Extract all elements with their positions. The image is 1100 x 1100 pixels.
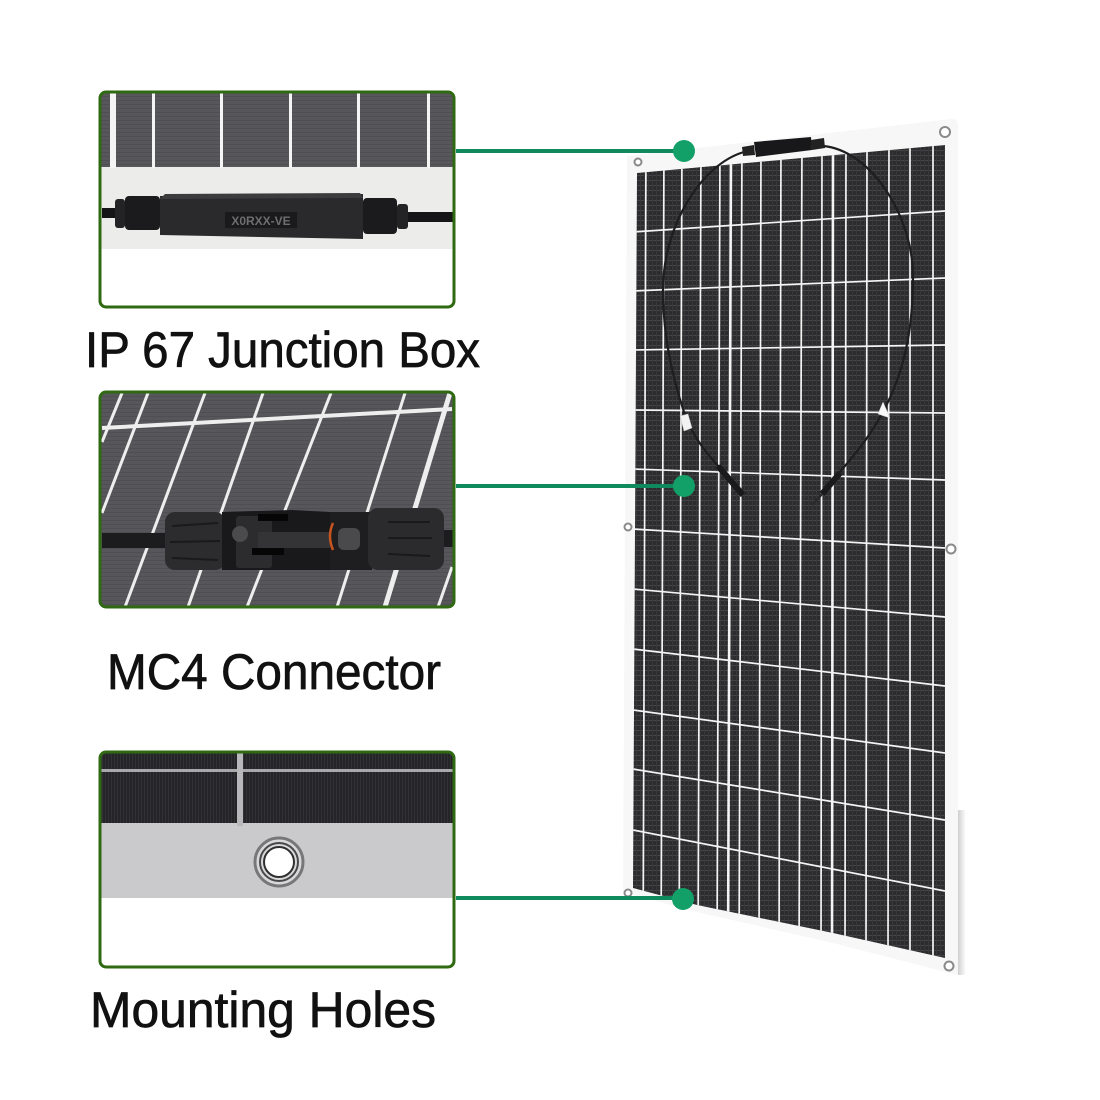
detail panel: mounting holes (100, 752, 456, 968)
solar cell grid (630, 140, 950, 965)
detail panel: MC4 connector (100, 392, 456, 608)
panel white backing sheet (623, 119, 958, 975)
callout connector: MC4 (456, 475, 695, 497)
heading: IP 67 Junction Box: IP 67 Junction Box (85, 322, 480, 378)
callout connector: mounting holes (456, 888, 694, 910)
panel shadow (958, 810, 966, 975)
detail panel: junction box (100, 92, 456, 308)
mounting grommets (624, 127, 956, 970)
solar panel (623, 119, 966, 975)
junction box label text: X0RXX-VE (231, 214, 291, 228)
heading: MC4 Connector: MC4 Connector (107, 644, 441, 700)
heading: Mounting Holes: Mounting Holes (90, 982, 436, 1038)
looped cable with junction box and connectors (663, 137, 913, 505)
callout connector: junction box (456, 140, 695, 162)
